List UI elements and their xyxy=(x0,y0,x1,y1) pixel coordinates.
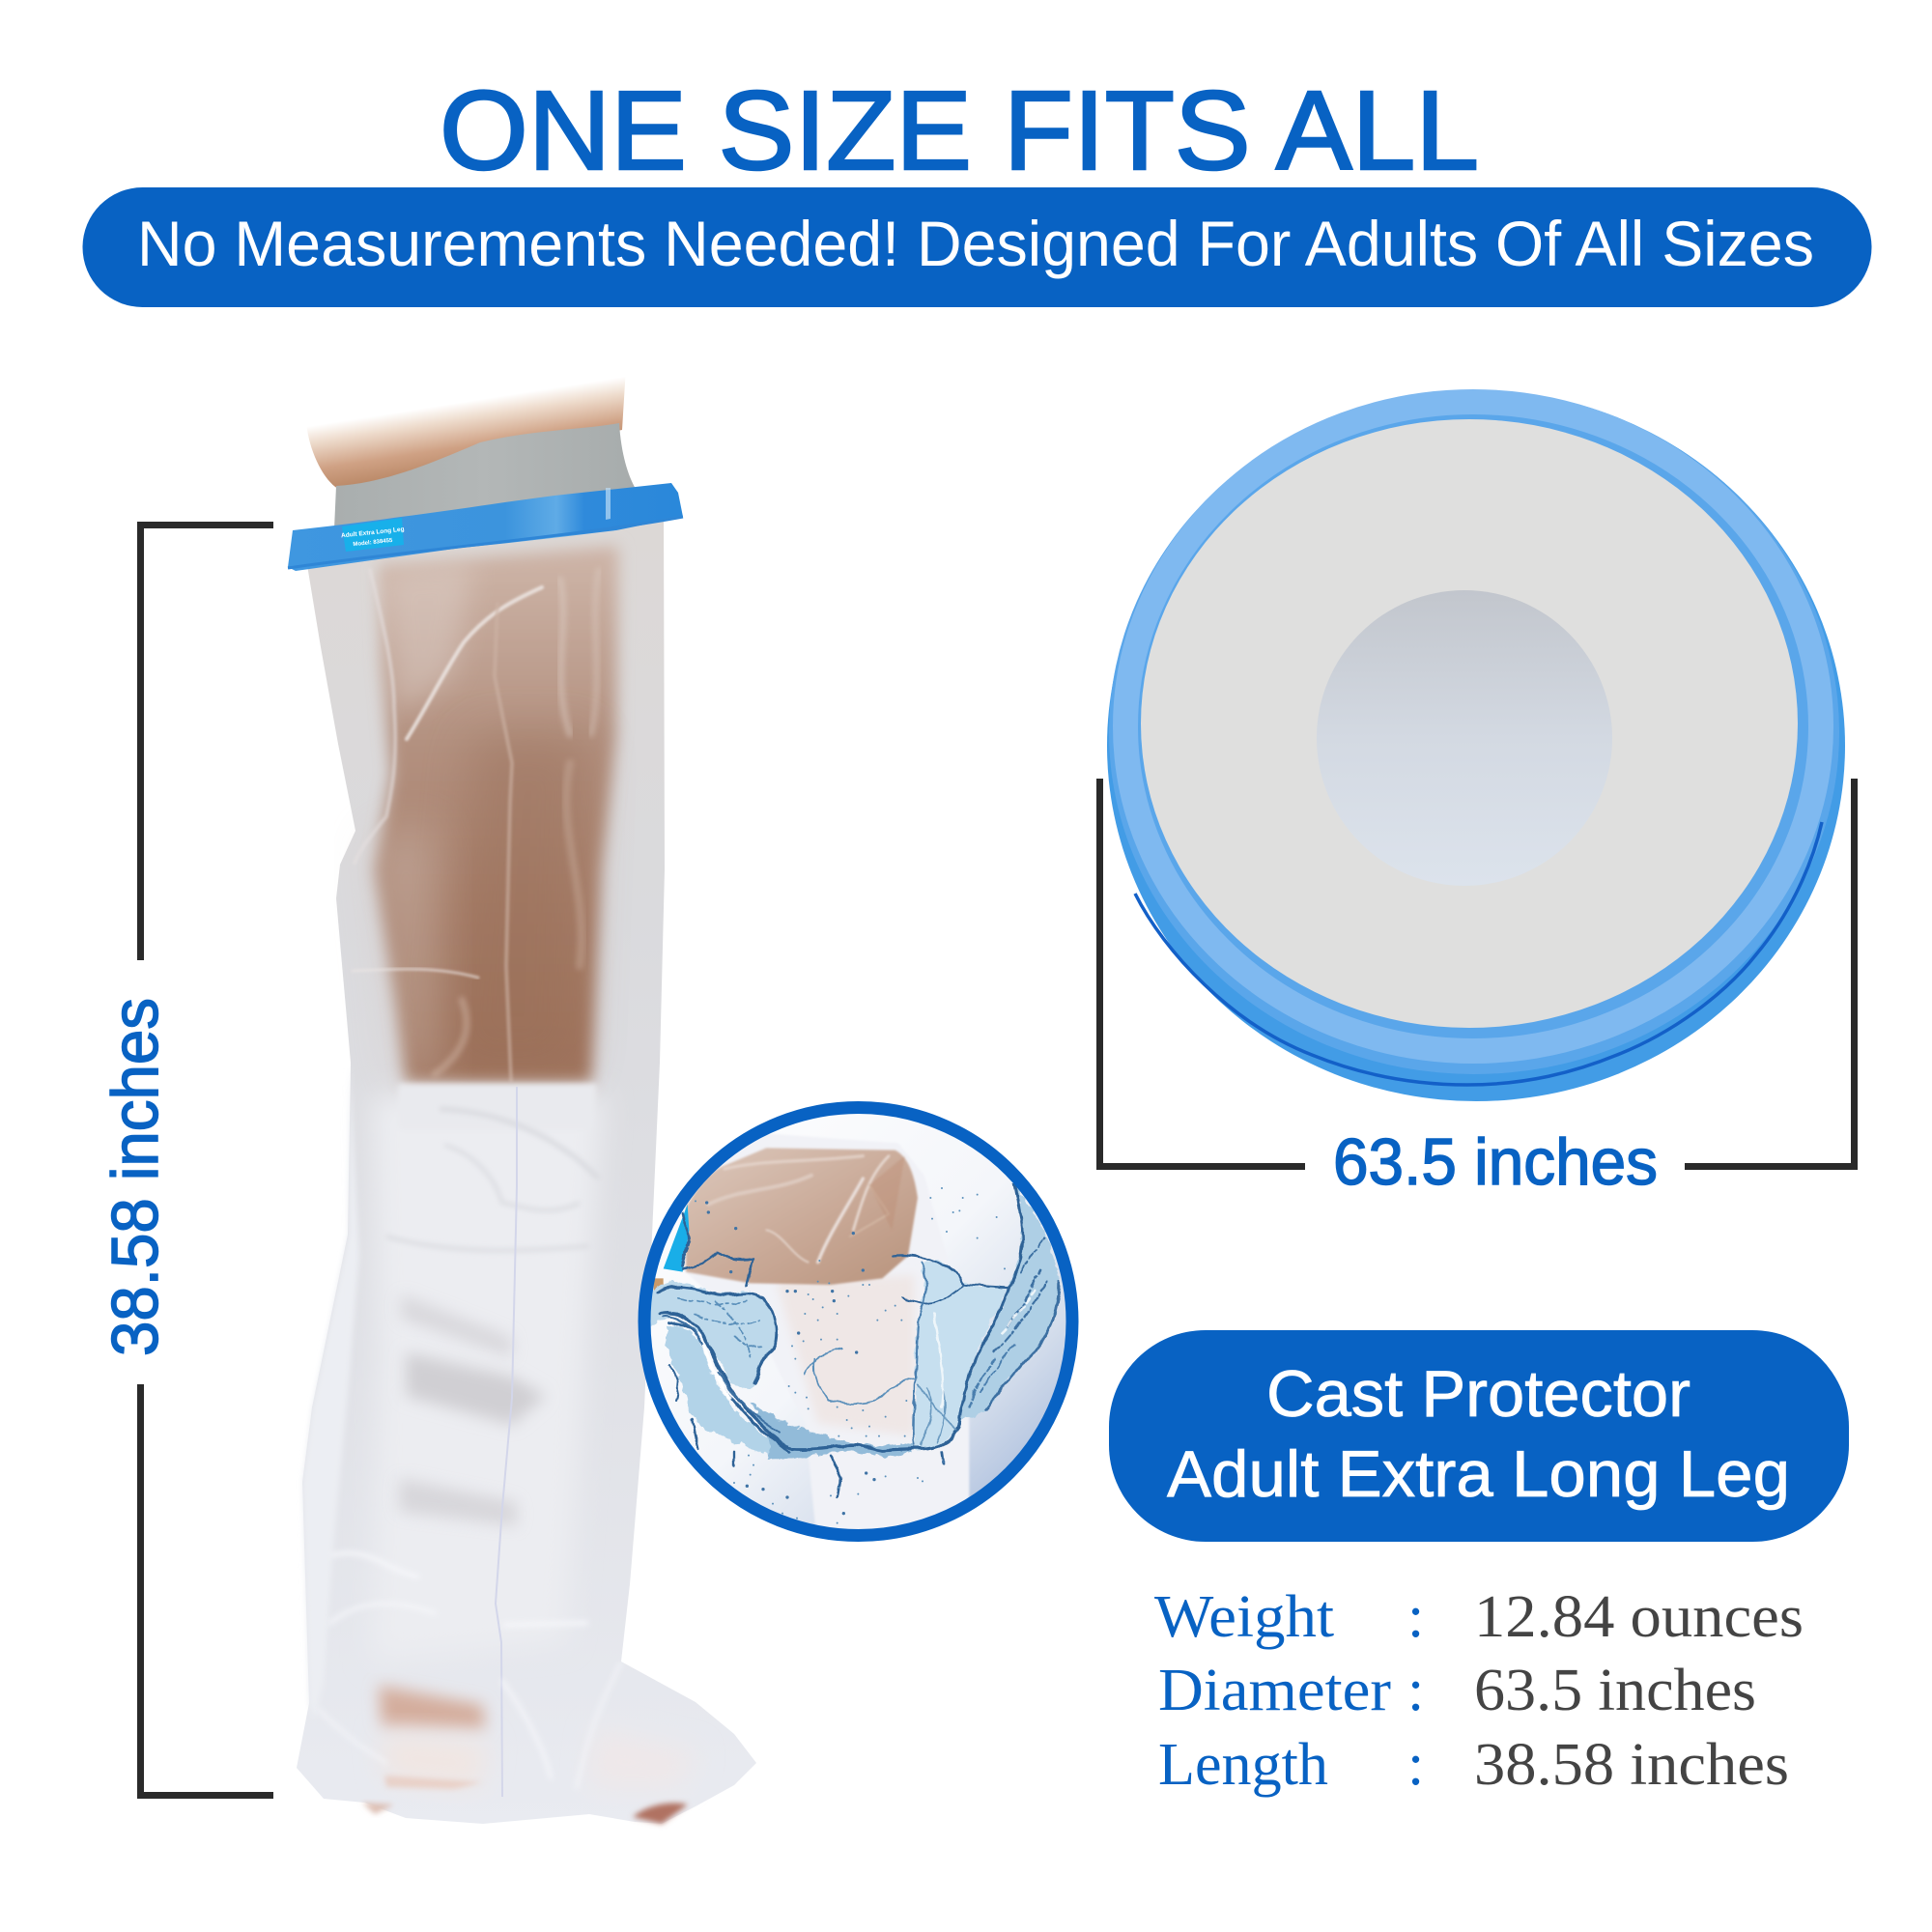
water droplets xyxy=(707,1203,944,1514)
cast creases xyxy=(386,1109,599,1250)
title: ONE SIZE FITS ALL xyxy=(440,68,1479,193)
product photo: leg in cast protector xyxy=(288,367,756,1824)
white cast beneath xyxy=(372,1084,604,1662)
length row xyxy=(1158,1732,1789,1798)
diameter bracket xyxy=(1099,779,1855,1167)
diameter label: 63.5 inches xyxy=(1333,1125,1658,1199)
product name banner: Adult Extra Long Leg xyxy=(1167,1437,1790,1511)
diameter row: Diameter xyxy=(1158,1658,1391,1723)
transparent bag xyxy=(297,512,756,1824)
white bag behind sleeve xyxy=(686,1133,969,1552)
diameter row xyxy=(1158,1658,1756,1723)
thigh skin xyxy=(301,367,626,489)
weight row: Weight xyxy=(1154,1584,1334,1650)
product name banner xyxy=(1109,1330,1849,1542)
outer skirt xyxy=(1107,390,1845,1101)
rim xyxy=(1109,390,1839,1074)
centre hole xyxy=(1317,590,1612,886)
length row: Length xyxy=(1158,1732,1328,1798)
subtitle banner xyxy=(83,187,1872,307)
product photo: round collar xyxy=(1107,390,1845,1101)
specification list xyxy=(1154,1584,1804,1798)
sleeve folds xyxy=(708,1156,905,1263)
water contours xyxy=(657,1185,1060,1497)
diameter row: : xyxy=(1407,1658,1424,1723)
length row: : xyxy=(1407,1732,1424,1798)
length label: 38.58 inches xyxy=(99,998,172,1356)
inset photo: water splash xyxy=(638,1101,1082,1552)
blue collar ring: Adult Extra Long Leg xyxy=(341,526,405,539)
blue collar xyxy=(664,1205,689,1272)
diameter row: 63.5 inches xyxy=(1474,1658,1756,1723)
bag folds xyxy=(353,570,599,1080)
inset ring xyxy=(644,1107,1072,1536)
rim groove xyxy=(1135,822,1822,1085)
bag highlights xyxy=(319,1553,621,1787)
inner disc xyxy=(1141,419,1798,1028)
blue collar ring xyxy=(288,483,683,571)
cast shadow bands xyxy=(399,1294,546,1526)
blue collar ring: Model: 838455 xyxy=(353,538,393,548)
length bracket xyxy=(141,526,273,1795)
bag seam xyxy=(496,1087,517,1797)
water fills xyxy=(650,1185,1060,1459)
grey sealing band xyxy=(333,423,636,551)
leg skin through bag xyxy=(372,546,618,1084)
weight row xyxy=(1154,1584,1804,1650)
product name banner: Cast Protector xyxy=(1266,1357,1690,1431)
water foam highlights xyxy=(703,1288,1037,1407)
sleeve skin xyxy=(686,1148,918,1285)
weight row: : xyxy=(1407,1584,1424,1650)
weight row: 12.84 ounces xyxy=(1474,1584,1804,1650)
length row: 38.58 inches xyxy=(1474,1732,1789,1798)
foot skin xyxy=(362,1686,698,1824)
subtitle banner: No Measurements Needed! Designed For Adults Of All Sizes xyxy=(137,208,1814,279)
